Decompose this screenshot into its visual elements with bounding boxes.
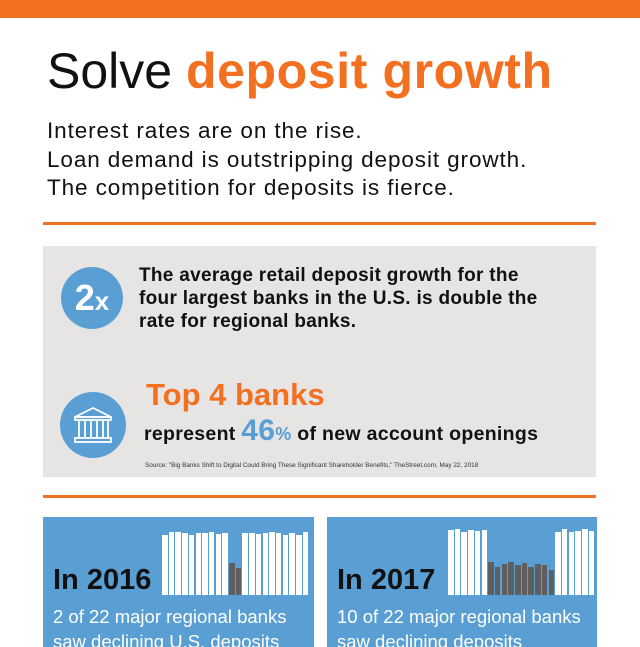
source: Source: "Big Banks Shift to Digital Could Bring These Significant Shareholder Benefits," TheStreet.com, May 22, 2018 <box>145 462 478 469</box>
chart: 2017 bars <box>448 529 594 595</box>
top orange bar <box>0 0 640 18</box>
text: 2016 <box>53 606 286 647</box>
title: Solve deposit growth <box>47 43 553 99</box>
icon: 2x circle: 2x <box>75 277 109 318</box>
text: 2016: 2 of 22 major regional banks <box>53 606 286 627</box>
heading: In 2017: In 2017 <box>337 564 435 596</box>
text: average growth: rate for regional banks. <box>139 311 356 332</box>
text: 46%: represent 46% of new account openings <box>144 414 538 447</box>
heading: top 4 banks: Top 4 banks <box>146 377 325 412</box>
subtitle text: Interest rates are on the rise. <box>47 118 363 143</box>
text: average growth: four largest banks in the U.S. is double the <box>139 288 538 309</box>
subtitle text: The competition for deposits is fierce. <box>47 175 455 200</box>
panel: 2017 <box>327 517 597 647</box>
text: average growth: The average retail deposit growth for the <box>139 265 519 286</box>
text: 2017: 10 of 22 major regional banks <box>337 606 581 627</box>
text: 2017 <box>337 606 581 647</box>
panel: stats <box>43 246 596 477</box>
text: average growth <box>139 265 538 332</box>
panel: 2016 <box>43 517 314 647</box>
chart: 2016 bars <box>162 532 308 595</box>
icon: 2x circle <box>61 267 123 329</box>
subtitle text: Loan demand is outstripping deposit growth. <box>47 146 527 172</box>
subtitle text <box>47 118 527 200</box>
heading: In 2016: In 2016 <box>53 564 151 596</box>
icon: bank <box>60 392 126 458</box>
